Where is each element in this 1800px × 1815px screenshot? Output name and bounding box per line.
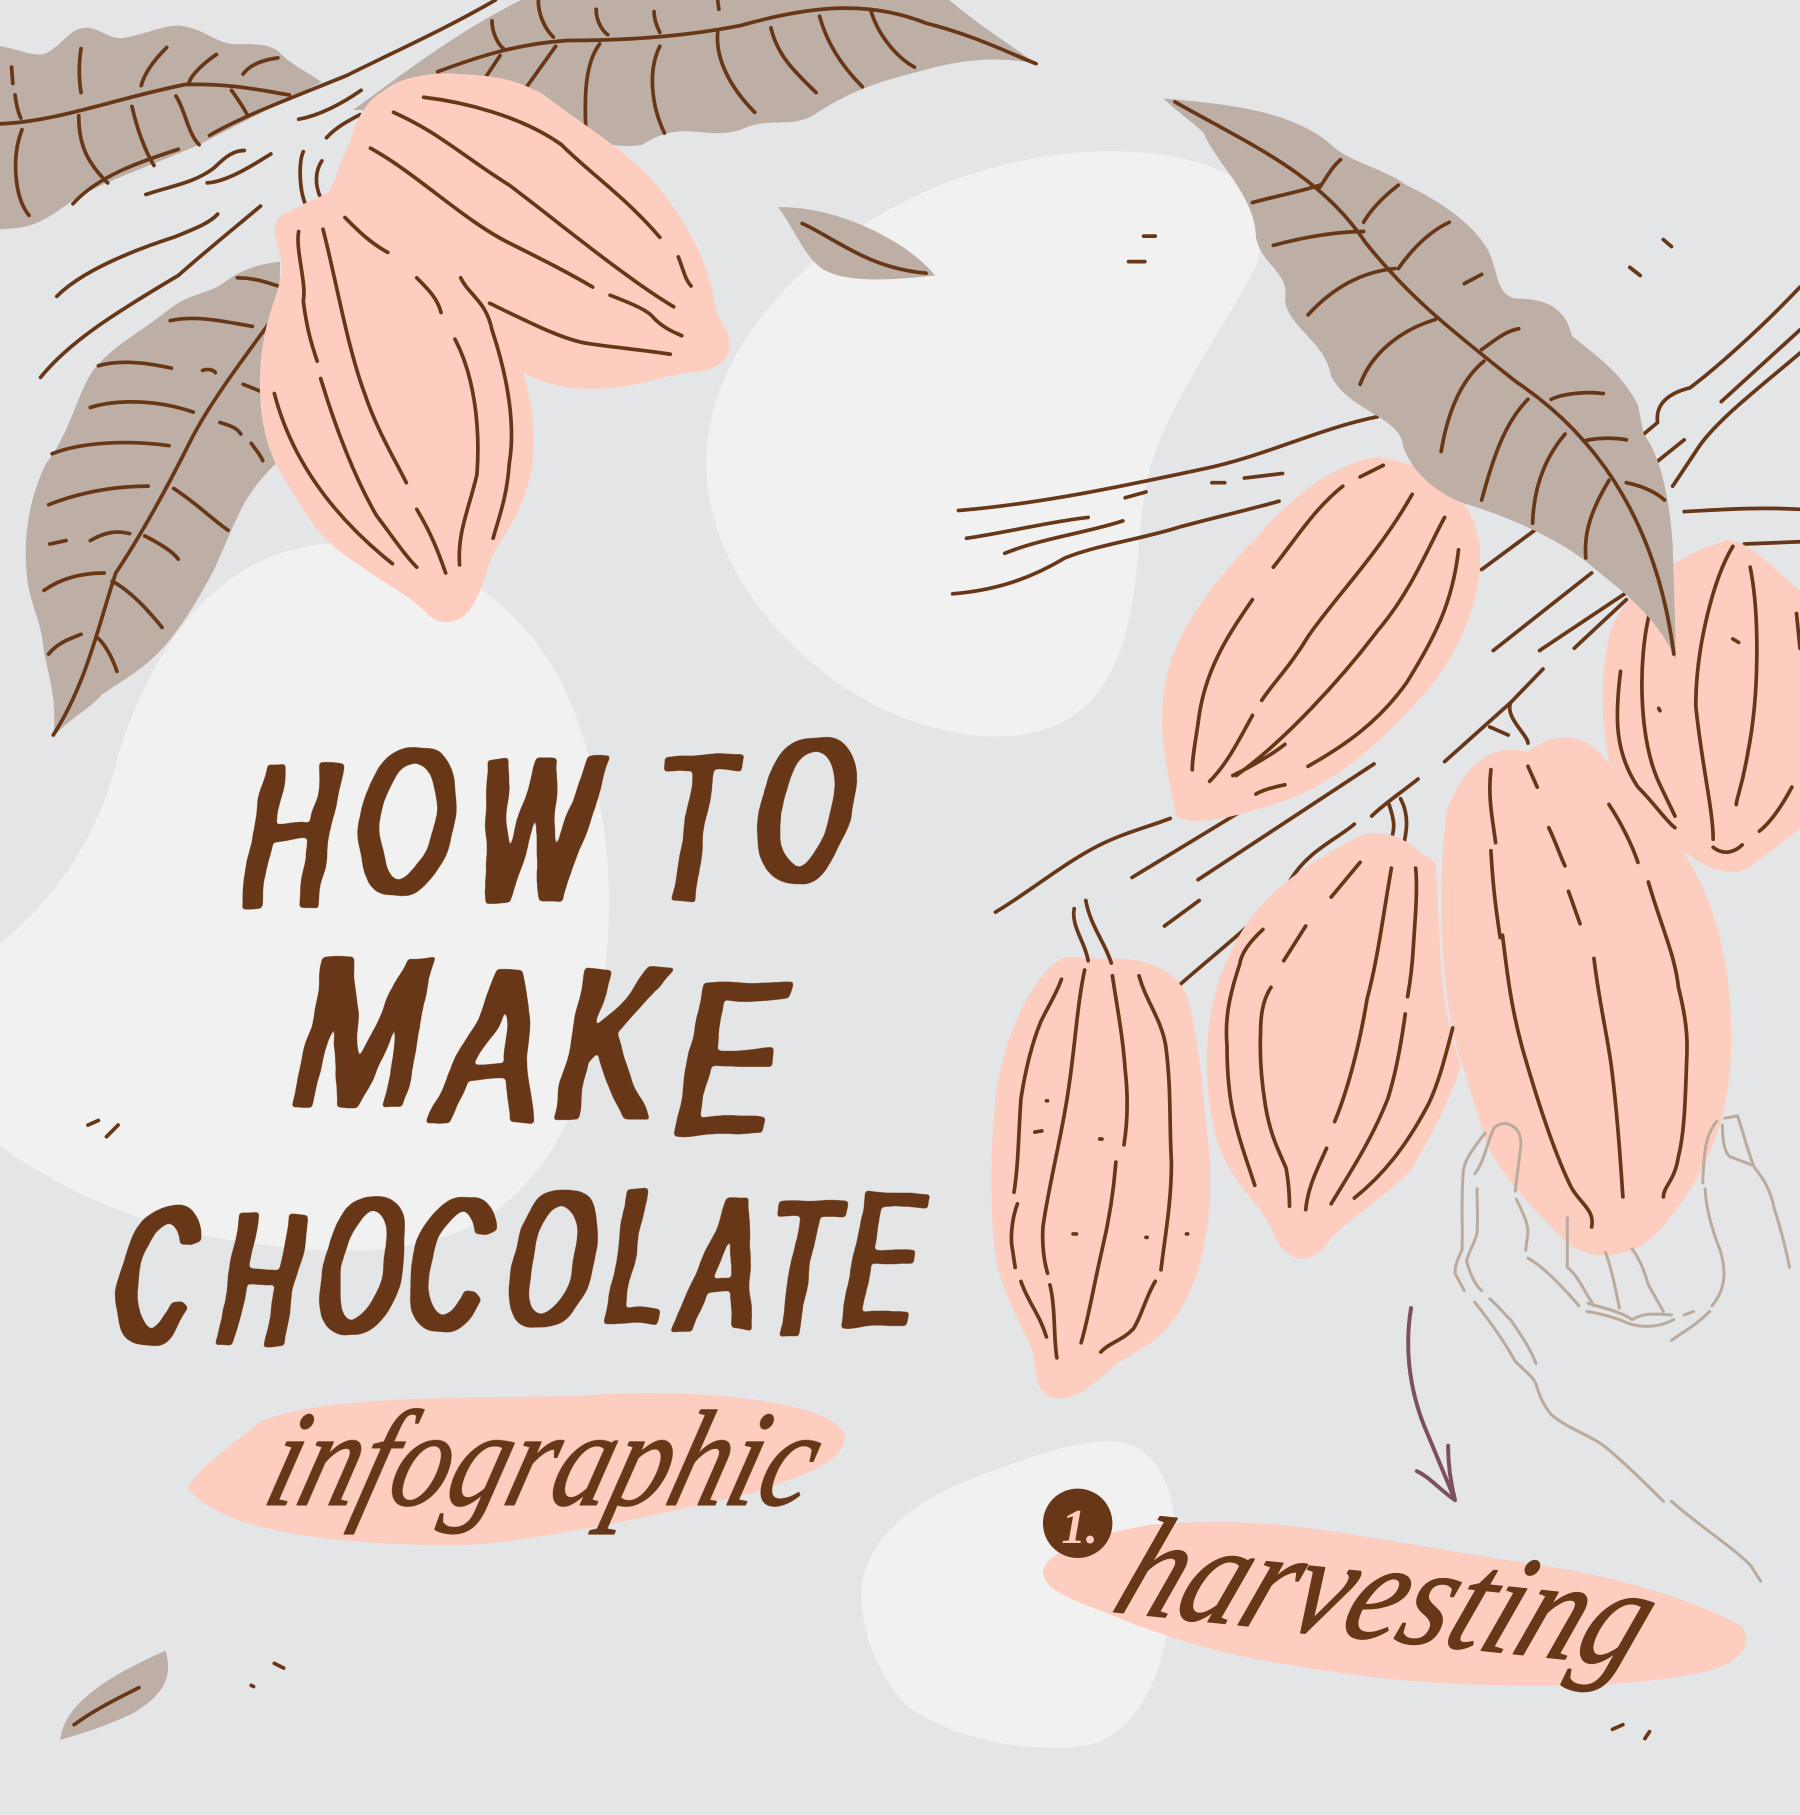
cocoa pod: centre right diagonal — [1162, 457, 1480, 821]
branches: right — [953, 287, 1800, 984]
background blob: behind title — [0, 544, 609, 1251]
leaf: top left — [0, 25, 322, 229]
leaf: left — [26, 262, 280, 737]
leaf: small middle — [778, 207, 935, 279]
decorative dashes — [88, 236, 1671, 1739]
cocoa pod: large hanging — [1441, 737, 1731, 1255]
hand holding pod — [1455, 1116, 1790, 1581]
cocoa pods: top left pair — [260, 74, 730, 622]
leaf: small bottom left — [60, 1651, 168, 1740]
subtitle ribbon: infographic: infographic — [252, 1384, 839, 1535]
cocoa pod: far right — [1603, 540, 1800, 872]
title line: MAKE: MAKE — [270, 910, 813, 1182]
leaf: top centre — [353, 0, 1036, 146]
title: HOW TO MAKE CHOCOLATE — [96, 692, 941, 1389]
step number badge: 1. — [1061, 1500, 1098, 1554]
leaf: right large — [1163, 98, 1676, 660]
step number badge — [1043, 1489, 1112, 1558]
branches: top left — [41, 0, 495, 377]
background blob: top centre — [706, 151, 1260, 737]
cocoa pod: lower left hanging — [991, 901, 1210, 1398]
title line: HOW TO: HOW TO — [229, 692, 872, 952]
step label: 1. harvesting — [1043, 1487, 1746, 1697]
title line: CHOCOLATE: CHOCOLATE — [96, 1148, 941, 1389]
step title: harvesting — [1097, 1487, 1683, 1697]
background blob: bottom centre — [861, 1441, 1176, 1748]
arrow: down to harvesting — [1408, 1308, 1455, 1500]
cocoa pod: middle hanging — [1207, 833, 1461, 1259]
